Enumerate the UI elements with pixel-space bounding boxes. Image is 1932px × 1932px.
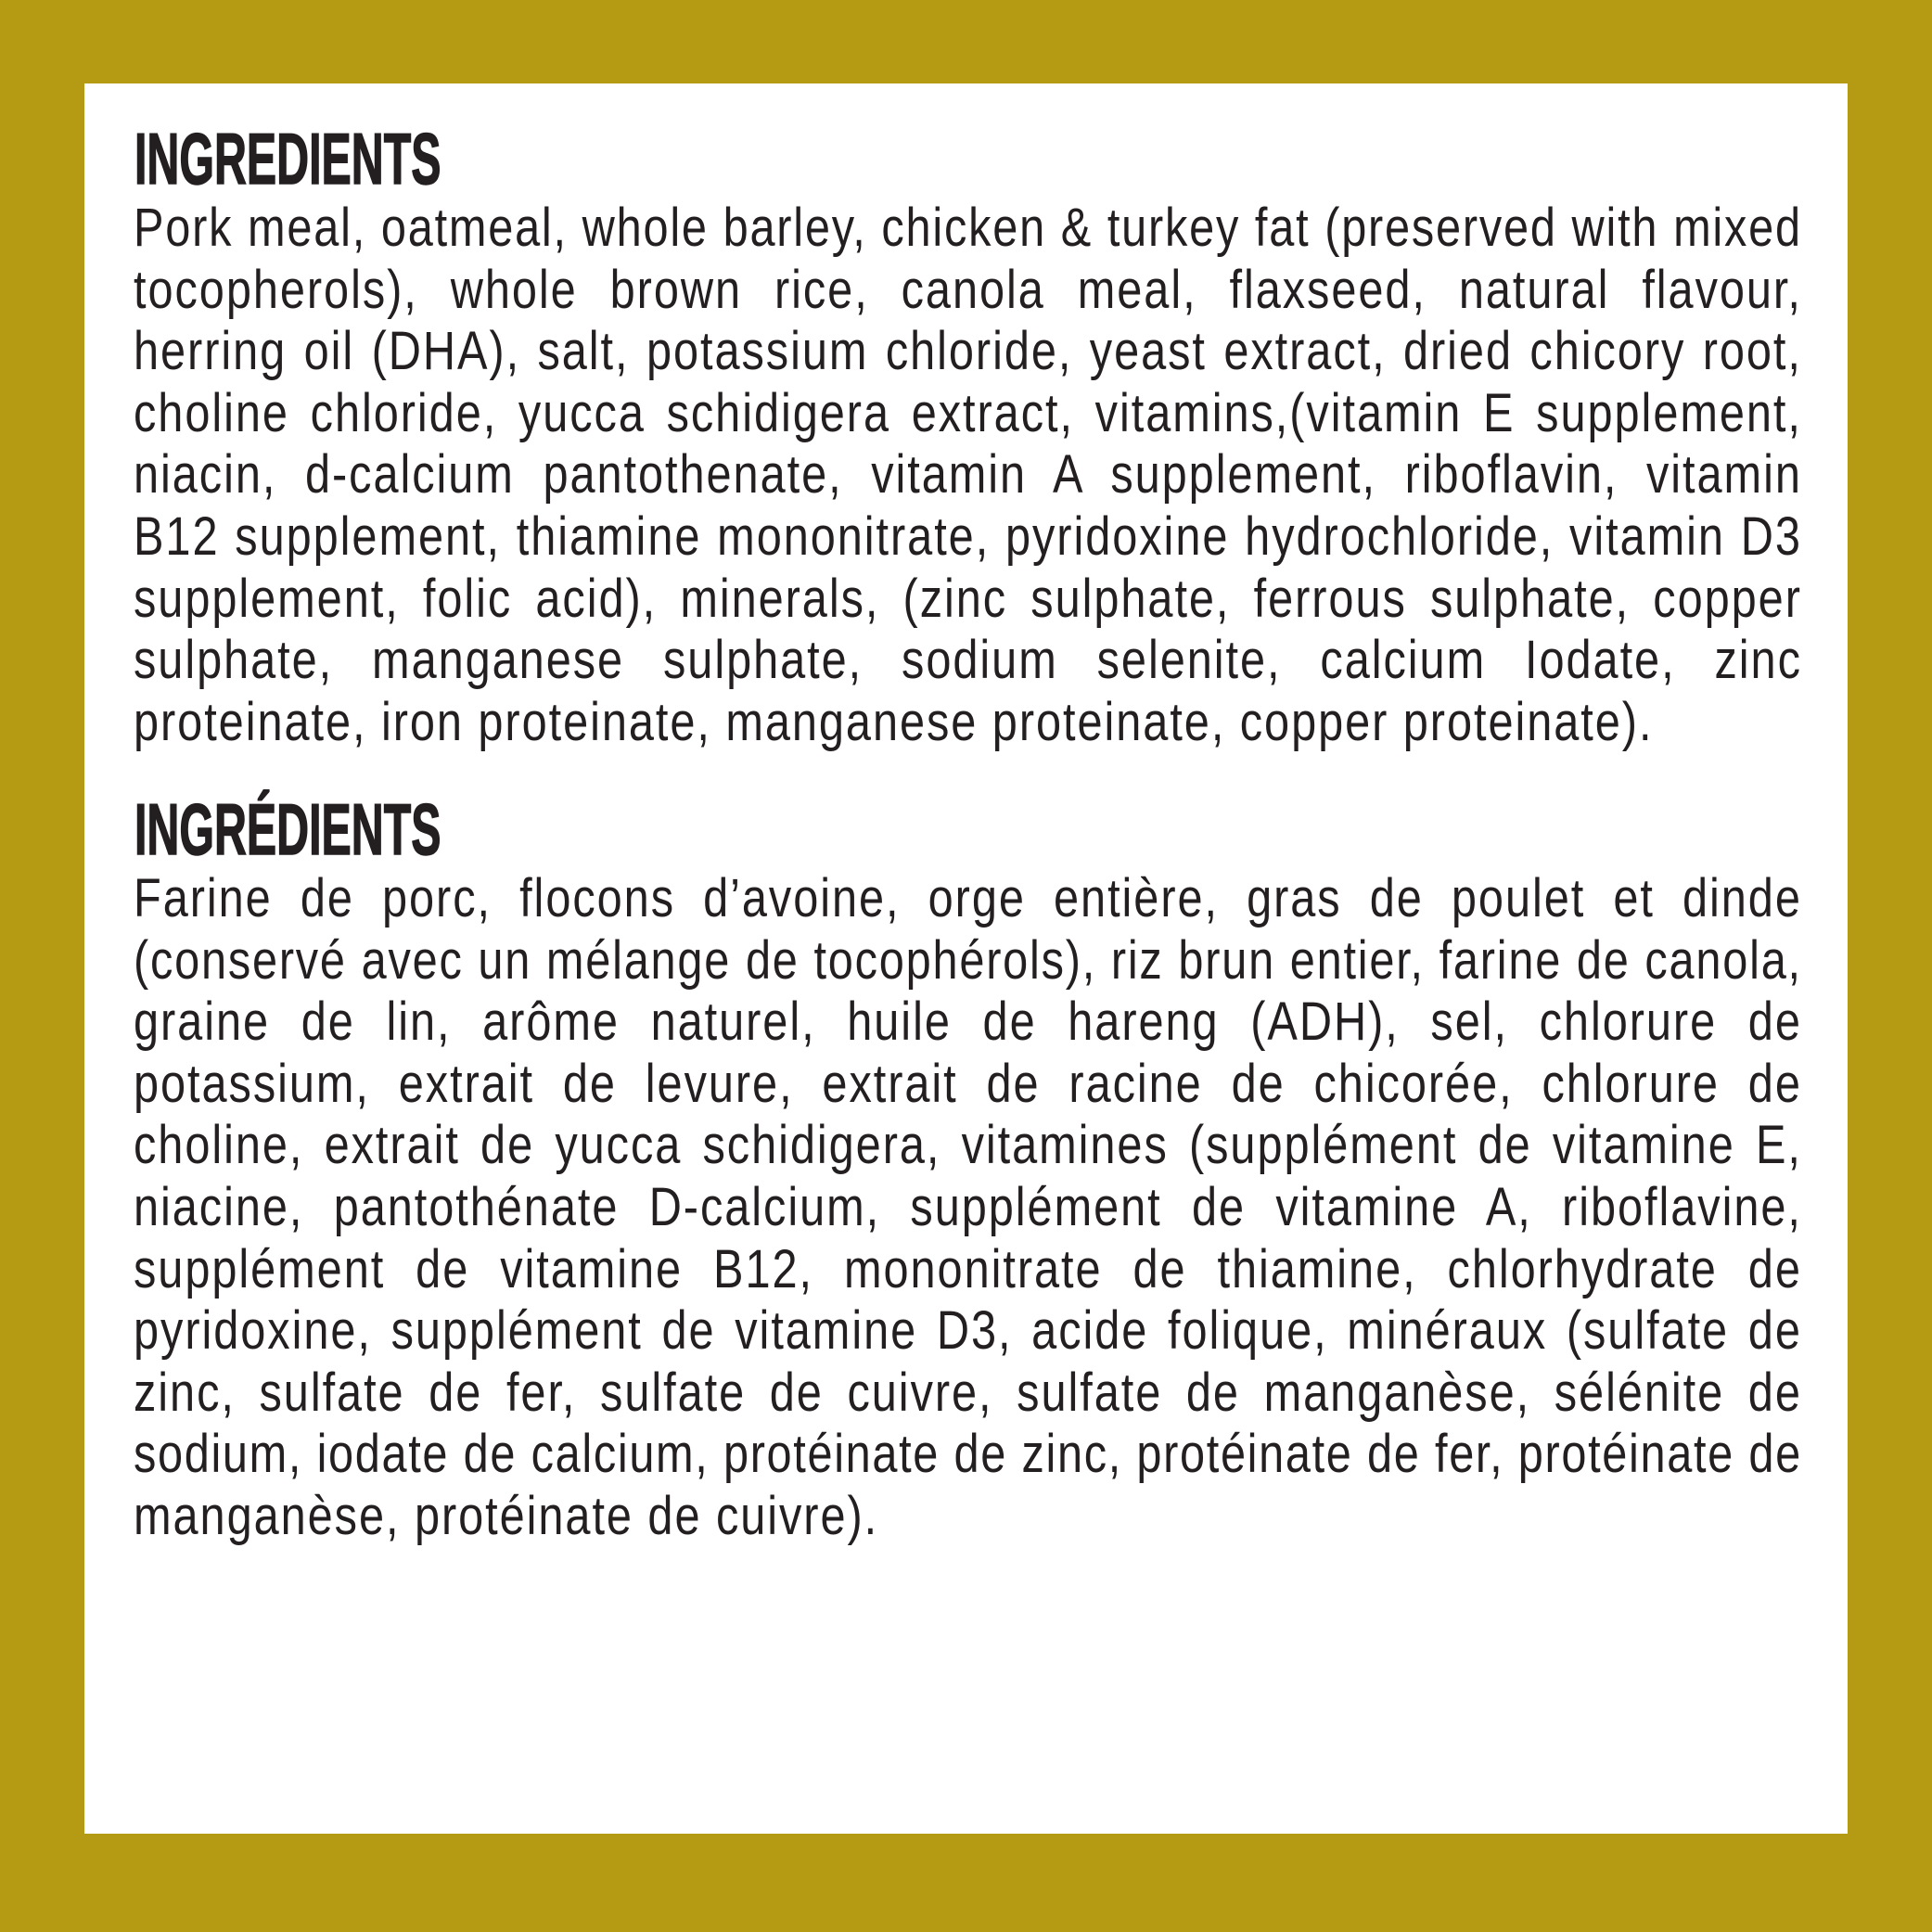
text block: English ingredients bbox=[134, 198, 1802, 752]
heading: French: INGRÉDIENTS bbox=[134, 788, 441, 870]
text block: English ingredients: niacin, d-calcium pantothenate, vitamin A supplement, riboflavin, vitamin bbox=[134, 444, 1802, 505]
text block: French ingredients: pyridoxine, supplément de vitamine D3, acide folique, minéraux (sulfate de bbox=[134, 1300, 1802, 1361]
text block: French ingredients: (conservé avec un mélange de tocophérols), riz brun entier, farine de canola, bbox=[134, 930, 1802, 991]
text block: French ingredients bbox=[134, 868, 1802, 1546]
text block: English ingredients: sulphate, manganese sulphate, sodium selenite, calcium Iodate, zinc bbox=[134, 630, 1802, 690]
text block: English ingredients: herring oil (DHA), salt, potassium chloride, yeast extract, dried chicory root, bbox=[134, 321, 1802, 381]
text block: French ingredients: potassium, extrait de levure, extrait de racine de chicorée, chlorure de bbox=[134, 1054, 1802, 1114]
text block: French ingredients: sodium, iodate de calcium, protéinate de zinc, protéinate de fer, protéinate de bbox=[134, 1424, 1802, 1484]
text block: English ingredients: Pork meal, oatmeal, whole barley, chicken & turkey fat (preserved with mixed bbox=[134, 198, 1802, 258]
text block: French ingredients: zinc, sulfate de fer, sulfate de cuivre, sulfate de manganèse, sélénite de bbox=[134, 1363, 1802, 1423]
text block: French ingredients: Farine de porc, flocons d’avoine, orge entière, gras de poulet et dinde bbox=[134, 868, 1802, 928]
text block: English ingredients: supplement, folic acid), minerals, (zinc sulphate, ferrous sulphate, copper bbox=[134, 569, 1802, 629]
text block: French ingredients: graine de lin, arôme naturel, huile de hareng (ADH), sel, chlorure de bbox=[134, 992, 1802, 1052]
text block: English ingredients: tocopherols), whole brown rice, canola meal, flaxseed, natural flavour, bbox=[134, 260, 1802, 320]
text block: English ingredients: choline chloride, yucca schidigera extract, vitamins,(vitamin E supplement, bbox=[134, 383, 1802, 443]
text block: French ingredients: supplément de vitamine B12, mononitrate de thiamine, chlorhydrate de bbox=[134, 1239, 1802, 1299]
text block: French ingredients: choline, extrait de yucca schidigera, vitamines (supplément de vitamine E, bbox=[134, 1115, 1802, 1175]
heading: English: INGREDIENTS bbox=[134, 118, 441, 199]
text block: English ingredients: proteinate, iron proteinate, manganese proteinate, copper proteinate). bbox=[134, 692, 1653, 752]
text block: French ingredients: manganèse, protéinate de cuivre). bbox=[134, 1486, 878, 1546]
text block: French ingredients: niacine, pantothénate D-calcium, supplément de vitamine A, riboflavine, bbox=[134, 1177, 1802, 1237]
text block: English ingredients: B12 supplement, thiamine mononitrate, pyridoxine hydrochloride, vitamin D3 bbox=[134, 506, 1802, 567]
